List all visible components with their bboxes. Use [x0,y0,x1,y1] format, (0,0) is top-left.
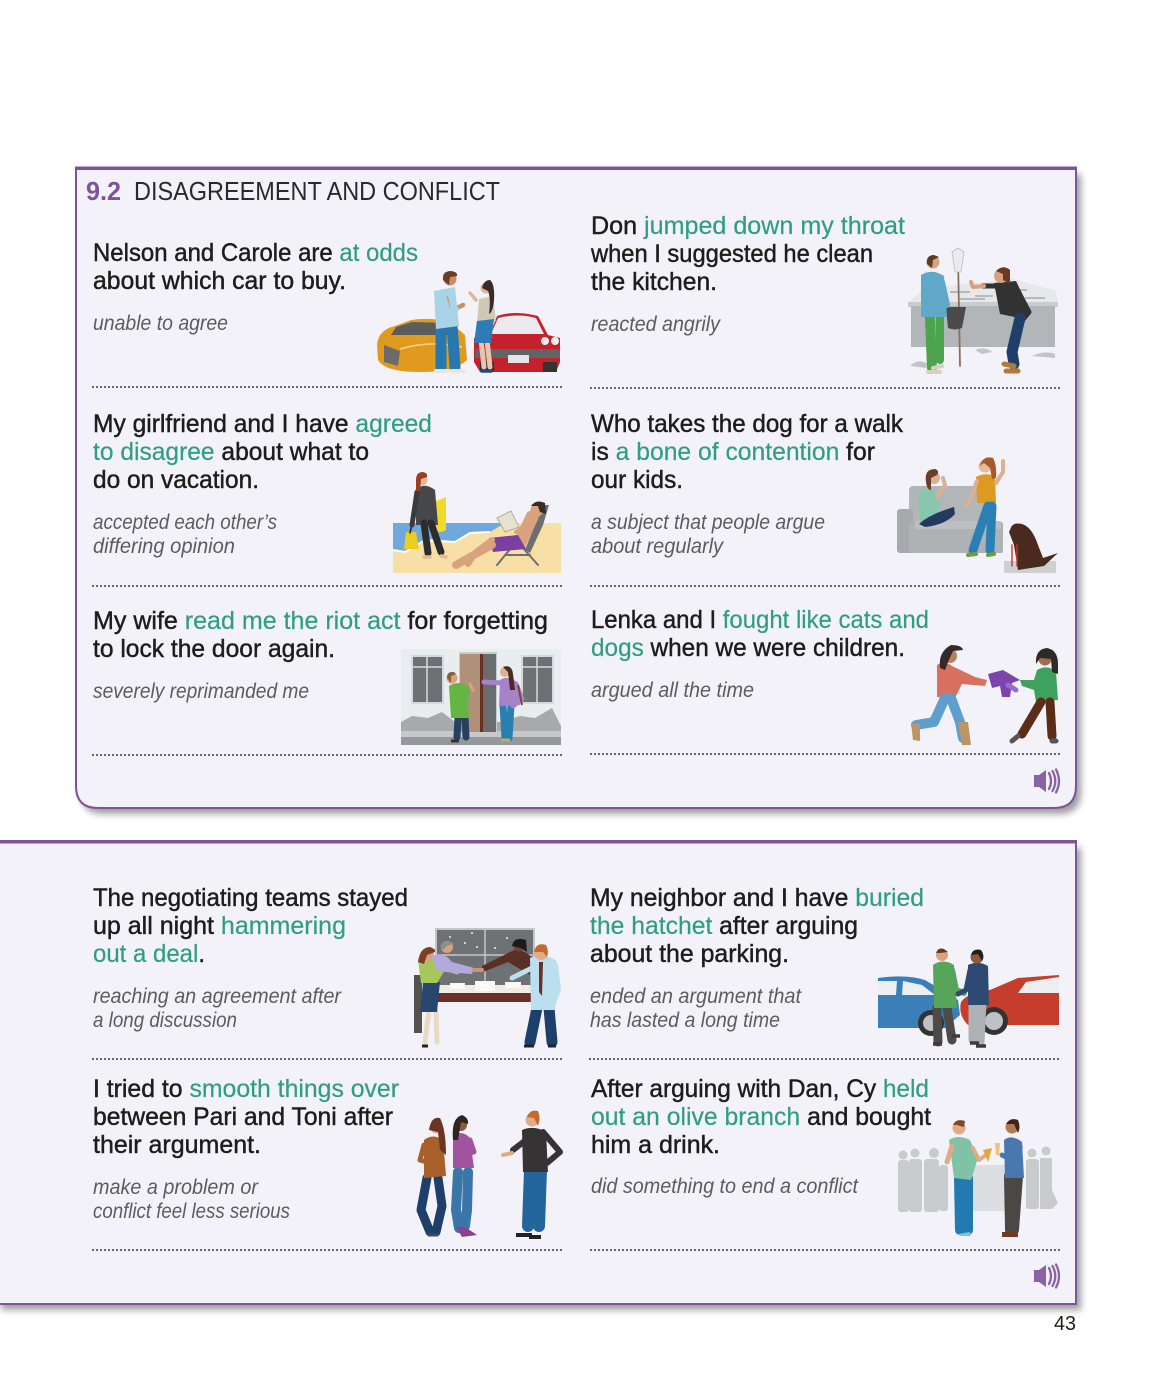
entry: smooth things over: conflict feel less serious [93,1200,290,1223]
entry: smooth things over: between Pari and Toni after [93,1103,393,1131]
illustration: two children pulling a toy [911,645,1058,745]
entry: agreed to disagree: accepted each other’s [93,511,277,534]
entry: read me the riot act: My wife read me the riot act for forgetting [93,607,548,635]
illustration: man mediating between two women [420,1111,560,1237]
illustration: wife confronting husband at front door [401,649,561,745]
entry: a bone of contention: Who takes the dog for a walk [591,410,903,438]
entry: a bone of contention: our kids. [591,466,683,494]
panel: resolving conflict [0,840,1077,1304]
heading: 9.2 [86,176,121,206]
entry: jumped down my throat [590,212,905,336]
entry: agreed to disagree: differing opinion [93,535,235,558]
entry: fought like cats and dogs: Lenka and I fought like cats and [591,606,929,634]
icon: audio speaker [1034,1264,1059,1288]
entry: at odds: Nelson and Carole are at odds [93,239,418,267]
entry: smooth things over: their argument. [93,1131,261,1159]
entry: agreed to disagree: My girlfriend and I have agreed [93,410,432,438]
illustration: negotiators shaking hands over a table [414,928,559,1046]
entry: read me the riot act: to lock the door again. [93,635,335,663]
divider [93,1058,562,1060]
entry: buried the hatchet: the hatchet after arguing [590,912,858,940]
entry: a bone of contention: about regularly [591,535,724,558]
panel: disagreement and conflict [75,166,1077,808]
entry: agreed to disagree: to disagree about what to [93,438,369,466]
entry: held out an olive branch: did something to end a conflict [591,1175,859,1198]
divider [591,1249,1060,1251]
entry: buried the hatchet [590,884,924,1032]
entry: hammering out a deal: a long discussion [93,1009,237,1032]
entry: buried the hatchet: ended an argument that [590,985,802,1008]
entry: hammering out a deal: The negotiating teams stayed [93,884,408,912]
entry: jumped down my throat: Don jumped down my throat [591,212,905,240]
entry: buried the hatchet: about the parking. [590,940,789,968]
illustration: couple arguing between two cars [377,271,560,372]
entry: fought like cats and dogs: dogs when we were children. [591,634,905,662]
divider [93,585,562,587]
entry: jumped down my throat: when I suggested he clean [590,240,873,268]
entry: jumped down my throat: reacted angrily [591,313,721,336]
illustration: men arguing in messy kitchen [908,248,1058,372]
entry: agreed to disagree [93,410,432,558]
divider [591,753,1060,755]
divider [591,387,1060,389]
entry: hammering out a deal [93,884,408,1032]
entry: held out an olive branch: him a drink. [591,1131,720,1159]
entry: hammering out a deal: out a deal. [93,940,205,968]
entry: fought like cats and dogs: argued all the time [591,679,754,702]
divider [591,585,1060,587]
illustration: neighbors shaking hands between cars [878,948,1059,1046]
entry: a bone of contention [591,410,903,558]
icon: audio speaker [1034,770,1059,792]
entry: jumped down my throat: the kitchen. [591,268,717,296]
illustration: women on a sofa with a dog [897,457,1058,573]
entry: buried the hatchet: has lasted a long time [590,1009,780,1032]
illustration: two men sharing drinks at a party [898,1119,1058,1237]
entry: buried the hatchet: My neighbor and I have buried [590,884,924,912]
entry: agreed to disagree: do on vacation. [93,466,259,494]
entry: a bone of contention: a subject that people argue [591,511,825,534]
divider [93,754,562,756]
illustration: diver and sunbather on a beach [393,472,561,573]
entry: held out an olive branch: After arguing with Dan, Cy held [591,1075,929,1103]
divider [93,386,562,388]
entry: a bone of contention: is a bone of contention for [591,438,875,466]
divider [93,1249,562,1251]
entry: held out an olive branch: out an olive branch and bought [591,1103,931,1131]
entry: smooth things over: make a problem or [93,1176,259,1199]
divider [590,1058,1060,1060]
entry: smooth things over [93,1075,399,1223]
entry: at odds: unable to agree [93,312,228,335]
entry: read me the riot act: severely reprimanded me [93,680,309,703]
entry: held out an olive branch [591,1075,931,1198]
page number: 43 [1054,1313,1076,1335]
entry: hammering out a deal: reaching an agreement after [93,985,342,1008]
entry: at odds: about which car to buy. [93,267,346,295]
entry: at odds [93,239,418,335]
entry: read me the riot act [93,607,548,703]
entry: smooth things over: I tried to smooth things over [93,1075,399,1103]
entry: fought like cats and dogs [591,606,929,702]
heading: DISAGREEMENT AND CONFLICT [134,176,500,206]
entry: hammering out a deal: up all night hammering [93,912,346,940]
